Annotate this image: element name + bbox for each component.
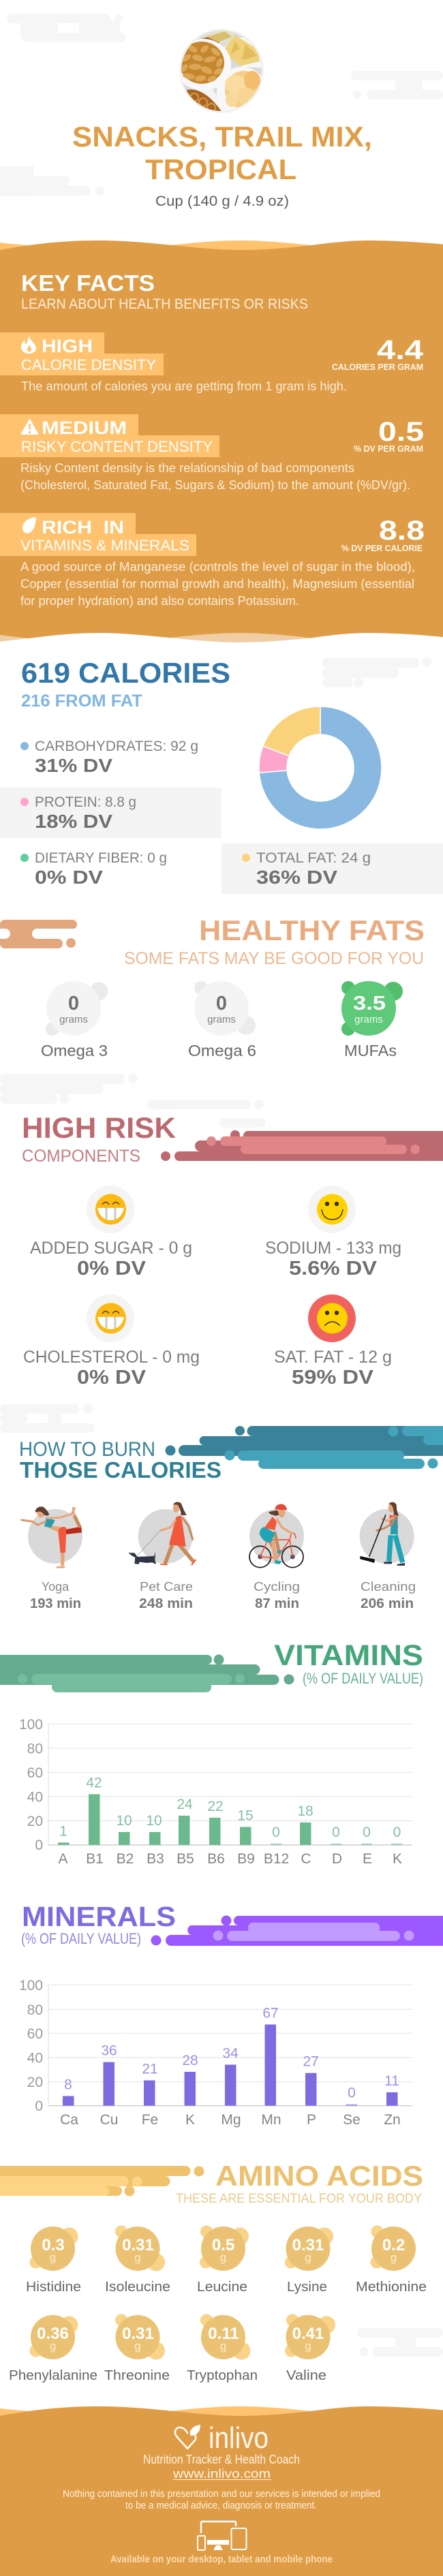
bar chart: vitamins: 80 — [27, 1741, 43, 1756]
nutrient: dietary fiber: DIETARY FIBER: 0 g — [35, 850, 167, 866]
heading: vitamins: VITAMINS — [274, 1639, 423, 1672]
amino: methionine — [356, 2225, 427, 2295]
fact: rich in vitamins and minerals — [0, 513, 425, 608]
title — [72, 121, 372, 185]
fact: medium risky content density: MEDIUM — [42, 418, 127, 438]
amino: histidine: g — [50, 2251, 56, 2264]
panel: vitamins — [0, 1639, 423, 1867]
background clouds: header — [0, 14, 443, 196]
icon: leaf — [22, 517, 36, 533]
title: TROPICAL — [145, 153, 296, 185]
stat: MUFAs: grams — [354, 1014, 383, 1025]
stat: MUFAs: MUFAs — [344, 1042, 397, 1059]
item: cholesterol: 0% DV — [77, 1367, 147, 1388]
heading: key facts: KEY FACTS — [21, 270, 155, 296]
bar chart: vitamins: 0 — [332, 1825, 340, 1840]
disclaimer: to be a medical advice, diagnosis or treatment. — [125, 2500, 317, 2511]
bar chart: vitamins: 24 — [177, 1797, 193, 1812]
bar chart: vitamins: 0 — [363, 1825, 371, 1840]
bar chart: vitamins: 18 — [297, 1803, 314, 1819]
bar chart: vitamins: 40 — [27, 1789, 43, 1805]
bar chart: vitamins: B2 — [117, 1851, 134, 1867]
tagline: Nutrition Tracker & Health Coach — [143, 2453, 300, 2466]
decoration: high risk banner — [161, 1130, 443, 1161]
bar chart: vitamins: A — [58, 1851, 68, 1867]
bar chart: minerals: Mg — [221, 2112, 241, 2128]
fact: high calorie density: CALORIE DENSITY — [21, 356, 156, 373]
bar chart: minerals: Ca — [60, 2112, 78, 2128]
serving size: Cup (140 g / 4.9 oz) — [155, 193, 289, 209]
stat: omega 6 — [188, 981, 256, 1059]
heading: minerals: MINERALS — [22, 1901, 176, 1932]
subheading: key facts: LEARN ABOUT HEALTH BENEFITS OR RISKS — [21, 296, 308, 312]
bar chart: vitamins: 1 — [59, 1823, 67, 1840]
activity: pet care: 248 min — [139, 1596, 193, 1611]
bar chart: minerals: 36 — [101, 2043, 117, 2059]
panel: key facts — [0, 240, 443, 644]
icon: smiling face — [317, 1194, 348, 1225]
bar chart: minerals — [19, 1978, 412, 2128]
decoration: minerals banner — [151, 1916, 443, 1946]
bar chart: minerals: Mn — [261, 2112, 281, 2128]
amino: isoleucine: 0.31 — [122, 2236, 154, 2254]
stat: omega 6: grams — [207, 1014, 236, 1025]
nutrient: protein: PROTEIN: 8.8 g — [35, 794, 136, 810]
item: sodium — [265, 1185, 401, 1279]
fact: medium risky content density: 0.5 — [378, 417, 424, 447]
icon: warning triangle — [20, 418, 39, 435]
amino: histidine — [26, 2226, 81, 2295]
bar chart: minerals: 0 — [348, 2085, 356, 2101]
bar chart: minerals: Zn — [384, 2112, 401, 2128]
fact: high calorie density: The amount of calories you are getting from 1 gram is high. — [21, 379, 347, 393]
amino: threonine: g — [134, 2340, 141, 2353]
bar chart: vitamins: B1 — [86, 1851, 104, 1867]
nutrient: total fat: 36% DV — [256, 867, 337, 888]
heading: calories: 619 CALORIES — [21, 657, 230, 689]
item: saturated fat: 59% DV — [292, 1367, 374, 1388]
amino: leucine: 0.5 — [212, 2236, 234, 2254]
bar chart: minerals: 21 — [142, 2062, 158, 2077]
fact: rich in vitamins and minerals: 8.8 — [379, 516, 425, 546]
stat: omega 3 — [41, 981, 108, 1059]
bar chart: minerals: 0 — [35, 2098, 43, 2114]
nutrient: carbohydrates — [20, 739, 198, 776]
fact: medium risky content density: (Cholesterol, Saturated Fat, Sugars & Sodium) to the amount (%DV/gr). — [20, 478, 410, 492]
bar chart: vitamins: 10 — [116, 1813, 132, 1829]
nutrient: dietary fiber: 0% DV — [35, 867, 103, 888]
bar chart: vitamins: D — [332, 1851, 342, 1867]
amino: methionine: 0.2 — [382, 2236, 405, 2254]
nutrient: protein: 18% DV — [35, 811, 112, 832]
bar chart: minerals: 11 — [384, 2073, 399, 2089]
panel: calories — [0, 657, 443, 894]
amino: valine: Valine — [286, 2368, 326, 2383]
bar chart: vitamins: 42 — [86, 1775, 102, 1790]
item: sodium: 5.6% DV — [289, 1258, 378, 1279]
amino: lysine: g — [305, 2251, 311, 2264]
heading: how to burn: HOW TO BURN — [19, 1438, 155, 1461]
activity: cycling: 87 min — [255, 1596, 299, 1611]
activity: cycling: Cycling — [254, 1580, 300, 1594]
amino: isoleucine: g — [134, 2251, 141, 2264]
call to action: Available on your desktop, tablet and mobile phone — [110, 2554, 333, 2565]
bar chart: minerals: Se — [343, 2112, 361, 2128]
panel: minerals — [19, 1901, 443, 2128]
amino: tryptophan — [187, 2314, 258, 2383]
icon: grinning face — [95, 1303, 126, 1334]
heading: high risk: HIGH RISK — [22, 1112, 176, 1145]
amino: methionine: Methionine — [356, 2280, 427, 2295]
amino: histidine: Histidine — [26, 2280, 81, 2295]
item: added sugar — [30, 1185, 192, 1279]
bar chart: vitamins: B9 — [237, 1851, 255, 1867]
bar chart: vitamins: B6 — [207, 1851, 225, 1867]
activity: cleaning: 206 min — [361, 1596, 414, 1611]
nutrient: protein — [0, 788, 222, 838]
activity: pet care: Pet Care — [140, 1580, 193, 1594]
bar chart: minerals: 80 — [27, 2002, 43, 2018]
stat: omega 3: grams — [59, 1014, 88, 1025]
panel: amino acids — [0, 2160, 443, 2383]
subheading: components: COMPONENTS — [22, 1147, 140, 1166]
item: sodium: SODIUM - 133 mg — [265, 1239, 401, 1258]
activity: yoga: 193 min — [30, 1596, 81, 1611]
item: cholesterol: CHOLESTEROL - 0 mg — [23, 1348, 200, 1367]
amino: leucine: g — [220, 2251, 226, 2264]
amino: lysine: 0.31 — [292, 2236, 324, 2254]
icon: desktop, tablet and phone — [198, 2521, 247, 2550]
bar chart: vitamins: 15 — [237, 1808, 254, 1823]
bar chart: minerals: P — [307, 2112, 316, 2128]
stat: omega 3: 0 — [68, 993, 79, 1014]
bar chart: vitamins — [19, 1717, 412, 1867]
subheading: healthy fats: SOME FATS MAY BE GOOD FOR YOU — [124, 949, 424, 968]
bar chart: vitamins: 0 — [272, 1825, 280, 1840]
bar chart: vitamins: 22 — [207, 1799, 224, 1814]
panel: how to burn calories — [0, 1404, 443, 1611]
amino: lysine: Lysine — [287, 2280, 327, 2295]
bar chart: vitamins: 60 — [27, 1765, 43, 1781]
bar chart: vitamins: 0 — [393, 1825, 401, 1840]
bar chart: vitamins: C — [301, 1851, 311, 1867]
disclaimer: Nothing contained in this presentation and our services is intended or implied — [63, 2488, 380, 2500]
fact: rich in vitamins and minerals: for proper hydration) and also contains Potassium. — [20, 594, 299, 608]
bar chart: minerals: 100 — [19, 1978, 43, 1993]
decoration: amino acids banner — [0, 2166, 204, 2197]
bar chart: vitamins: 0 — [35, 1837, 43, 1853]
item: added sugar: ADDED SUGAR - 0 g — [30, 1239, 192, 1258]
bar chart: minerals: Fe — [142, 2112, 158, 2128]
item: saturated fat: SAT. FAT - 12 g — [274, 1348, 392, 1367]
stat: omega 6: 0 — [216, 993, 227, 1014]
fact: medium risky content density — [0, 414, 424, 492]
bar chart: minerals: 8 — [64, 2077, 72, 2093]
fact: medium risky content density: % DV PER GRAM — [354, 444, 423, 454]
activity: yoga — [22, 1506, 82, 1611]
icon: flame — [21, 336, 36, 354]
fact: rich in vitamins and minerals: % DV PER CALORIE — [341, 543, 423, 553]
amino: valine: 0.41 — [292, 2325, 324, 2343]
icon: grinning face — [95, 1194, 126, 1225]
nutrient: carbohydrates: 31% DV — [35, 755, 112, 776]
stat: MUFAs — [341, 981, 403, 1059]
amino: threonine: 0.31 — [122, 2325, 154, 2343]
activity: cleaning: Cleaning — [361, 1580, 416, 1594]
amino: phenylalanine: 0.36 — [37, 2325, 69, 2343]
activity: cycling — [249, 1504, 304, 1611]
item: added sugar: 0% DV — [77, 1258, 147, 1279]
heading: amino acids: AMINO ACIDS — [215, 2160, 423, 2192]
amino: valine: g — [305, 2340, 311, 2353]
activity: pet care — [128, 1502, 196, 1611]
item: cholesterol — [23, 1294, 200, 1388]
fact: high calorie density: CALORIES PER GRAM — [332, 362, 423, 372]
stat: MUFAs: 3.5 — [353, 993, 386, 1014]
bar chart: vitamins: B5 — [177, 1851, 194, 1867]
amino: isoleucine — [105, 2225, 170, 2295]
amino: isoleucine: Isoleucine — [105, 2280, 170, 2295]
decoration: healthy fats banner — [0, 920, 87, 948]
amino: tryptophan: g — [220, 2340, 226, 2353]
bar chart: minerals: K — [185, 2112, 195, 2128]
item: saturated fat — [274, 1294, 392, 1388]
logo: inlivo: inlivo — [209, 2421, 269, 2455]
amino: lysine — [285, 2226, 333, 2295]
bar chart: minerals: 28 — [182, 2053, 198, 2068]
bar chart: vitamins: 10 — [146, 1813, 162, 1829]
amino: phenylalanine — [9, 2315, 97, 2383]
amino: leucine — [197, 2225, 249, 2295]
subheading: percent of daily value: (% OF DAILY VALUE) — [21, 1930, 141, 1947]
bar chart: minerals: Cu — [100, 2112, 118, 2128]
fact: rich in vitamins and minerals: RICH IN — [42, 517, 124, 538]
bar chart: minerals: 20 — [27, 2075, 43, 2090]
amino: histidine: 0.3 — [42, 2236, 65, 2254]
bar chart: vitamins: 20 — [27, 1814, 43, 1829]
icon: cyclist figure — [249, 1504, 304, 1568]
stat: omega 6: Omega 6 — [188, 1042, 256, 1059]
bar chart: minerals: 60 — [27, 2026, 43, 2042]
activity: yoga: Yoga — [42, 1580, 70, 1594]
heading: healthy fats: HEALTHY FATS — [199, 914, 425, 946]
bar chart: vitamins: B3 — [147, 1851, 164, 1867]
amino: tryptophan: Tryptophan — [187, 2368, 258, 2383]
stat: omega 3: Omega 3 — [41, 1042, 108, 1059]
amino: phenylalanine: Phenylalanine — [9, 2368, 97, 2383]
panel: high risk components — [0, 1074, 443, 1388]
decoration: burn banner — [165, 1426, 443, 1469]
activity: cleaning — [360, 1502, 416, 1611]
amino: leucine: Leucine — [197, 2280, 247, 2295]
title: SNACKS, TRAIL MIX, — [72, 121, 372, 153]
bar chart: vitamins: B12 — [264, 1851, 289, 1867]
bar chart: minerals: 34 — [222, 2045, 239, 2062]
fact: rich in vitamins and minerals: A good source of Manganese (controls the level of sugar in the blood), — [20, 560, 415, 574]
fact: medium risky content density: RISKY CONTENT DENSITY — [21, 438, 213, 455]
subheading: amino acids: THESE ARE ESSENTIAL FOR YOUR BODY — [176, 2192, 422, 2206]
bar chart: minerals: 67 — [262, 2006, 279, 2021]
subheading: calories from fat: 216 FROM FAT — [21, 692, 142, 711]
food photo: bowls of trail mix snacks — [179, 29, 264, 113]
fact: medium risky content density: Risky Content density is the relationship of bad components — [20, 461, 354, 475]
bar chart: minerals: 27 — [303, 2054, 319, 2070]
icon: sad face — [317, 1303, 348, 1334]
bar chart: vitamins: 100 — [19, 1717, 43, 1733]
donut chart: macronutrients — [259, 707, 382, 829]
nutrient: dietary fiber — [20, 850, 167, 888]
fact: high calorie density: HIGH — [42, 336, 93, 356]
icon: sweeping figure — [360, 1502, 414, 1566]
panel: footer — [0, 2406, 443, 2576]
amino: threonine: Threonine — [104, 2368, 170, 2383]
bar chart: vitamins: K — [393, 1851, 402, 1867]
amino: valine — [285, 2314, 335, 2383]
amino: phenylalanine: g — [50, 2340, 56, 2353]
amino: tryptophan: 0.11 — [208, 2325, 239, 2343]
fact: rich in vitamins and minerals: Copper (essential for normal growth and health), Magnesium (essential — [20, 577, 414, 591]
amino: methionine: g — [391, 2251, 397, 2264]
nutrient: total fat — [222, 843, 443, 894]
fact: rich in vitamins and minerals: VITAMINS & MINERALS — [20, 537, 189, 554]
website link: www.inlivo.com — [172, 2467, 271, 2481]
nutrient: total fat: TOTAL FAT: 24 g — [256, 850, 371, 866]
logo: inlivo — [175, 2421, 269, 2455]
amino: threonine — [104, 2314, 170, 2383]
fact: high calorie density — [0, 332, 424, 393]
fact: high calorie density: 4.4 — [377, 335, 424, 365]
bar chart: vitamins: E — [363, 1851, 372, 1867]
icon: dog walking figure — [128, 1502, 196, 1566]
decoration: vitamins banner — [0, 1654, 294, 1692]
disclaimer — [63, 2488, 380, 2511]
nutrient: carbohydrates: CARBOHYDRATES: 92 g — [35, 739, 198, 754]
bar chart: minerals: 40 — [27, 2051, 43, 2066]
heading: those calories: THOSE CALORIES — [20, 1457, 222, 1483]
icon: yoga figure — [22, 1506, 82, 1567]
panel: healthy fats — [0, 914, 425, 1059]
